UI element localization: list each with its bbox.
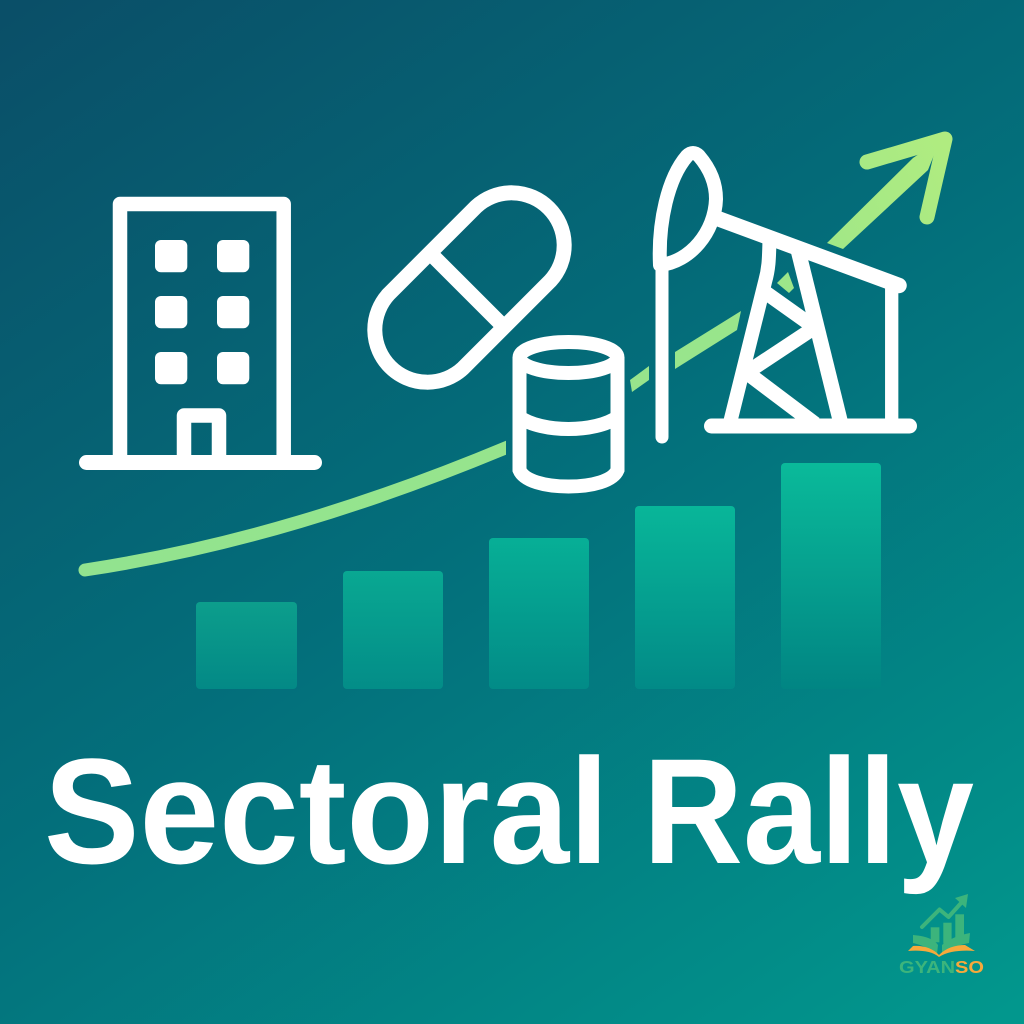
title	[44, 727, 974, 895]
icon: oil pump jack	[660, 153, 910, 437]
icon: capsule	[375, 193, 564, 382]
logo arrow	[922, 894, 968, 927]
logo book	[908, 933, 975, 957]
title: Sectoral	[44, 727, 609, 895]
logo: Gyanso	[899, 894, 984, 977]
bar chart	[196, 463, 881, 689]
icon: database barrel	[520, 342, 618, 486]
growth arrow	[85, 139, 945, 570]
title: Rally	[643, 727, 974, 895]
logo wordmark: GYAN SO	[899, 957, 984, 977]
icon: office building	[86, 204, 314, 462]
logo bars	[931, 914, 964, 944]
